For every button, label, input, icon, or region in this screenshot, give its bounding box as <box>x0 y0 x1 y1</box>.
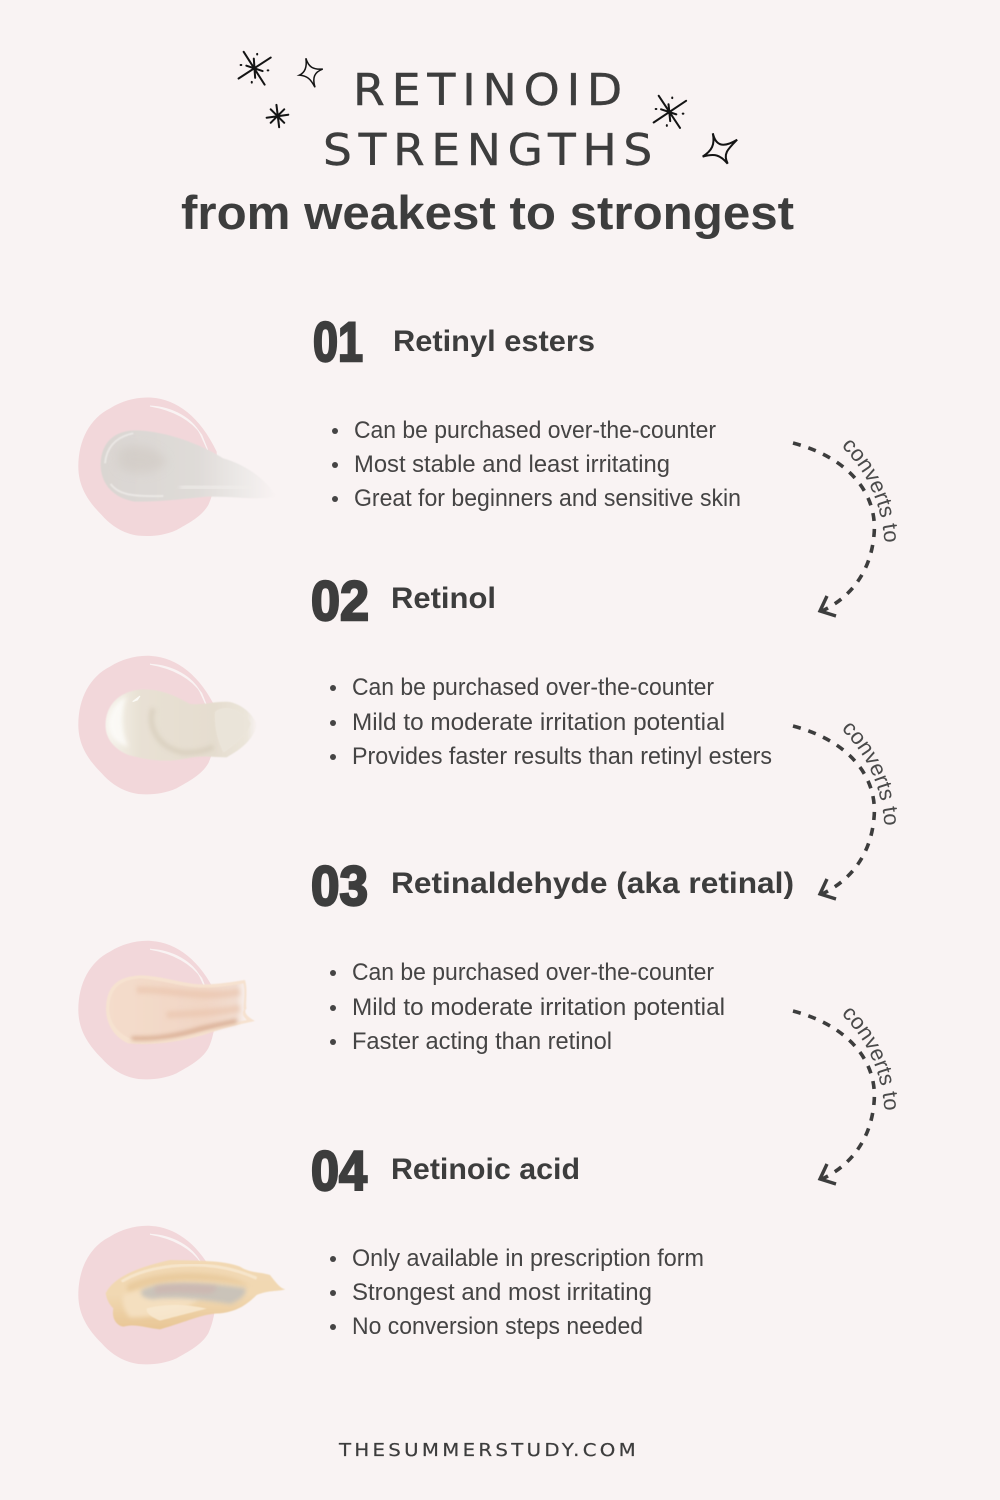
arrow 1: converts to: converts to <box>844 440 897 542</box>
heading: 02 Retinol: 02 <box>311 569 369 632</box>
bullet list 3: Can be purchased over-the-counter <box>352 959 714 986</box>
swatch 3: pink circle and peach scrub <box>78 941 255 1079</box>
bullet list 2: Can be purchased over-the-counter <box>352 674 714 701</box>
swatch 2: pink circle and cream <box>78 656 257 794</box>
footer url: THESUMMERSTUDY.COM <box>338 1440 639 1461</box>
bullet list 1 <box>332 417 741 512</box>
heading: 02 Retinol: Retinol <box>391 582 496 615</box>
arrow 2: converts to <box>792 724 897 901</box>
arrow 1: converts to <box>792 440 897 618</box>
bullet list 3: Mild to moderate irritation potential <box>352 994 725 1021</box>
heading: 01 Retinyl esters: 01 <box>313 310 363 373</box>
bullet list 1: Can be purchased over-the-counter <box>354 417 716 444</box>
heading: 01 Retinyl esters <box>313 310 595 373</box>
heading: 03 Retinaldehyde <box>311 854 794 917</box>
icon: sparkles left <box>239 52 323 127</box>
heading: 04 Retinoic acid: Retinoic acid <box>391 1153 580 1186</box>
swatch 1: pink circle and clear gel <box>78 397 277 536</box>
bullet list 4: Strongest and most irritating <box>352 1279 652 1306</box>
bullet list 4 <box>330 1245 704 1340</box>
heading: 01 Retinyl esters: Retinyl esters <box>393 325 595 358</box>
bullet list 2: Provides faster results than retinyl esters <box>352 743 772 770</box>
heading: 03 Retinaldehyde: Retinaldehyde (aka retinal) <box>391 867 794 900</box>
bullet list 4: Only available in prescription form <box>352 1245 704 1272</box>
swatch 4: pink circle and beige cream <box>78 1226 285 1364</box>
bullet list 1: Great for beginners and sensitive skin <box>354 485 741 512</box>
arrow 3: converts to: converts to <box>844 1008 897 1110</box>
bullet list 2 <box>330 674 772 770</box>
heading: 04 Retinoic acid <box>311 1139 580 1202</box>
bullet list 3: Faster acting than retinol <box>352 1028 612 1055</box>
title <box>323 65 659 176</box>
subtitle: from weakest to strongest <box>181 186 794 239</box>
heading: 03 Retinaldehyde: 03 <box>311 854 368 917</box>
heading: 04 Retinoic acid: 04 <box>311 1139 367 1202</box>
arrow 2: converts to: converts to <box>844 724 897 825</box>
title: RETINOID <box>353 65 629 116</box>
title: STRENGTHS <box>323 125 659 176</box>
bullet list 4: No conversion steps needed <box>352 1313 643 1340</box>
arrow 3: converts to <box>792 1008 897 1186</box>
bullet list 1: Most stable and least irritating <box>354 451 670 478</box>
bullet list 3 <box>330 959 725 1055</box>
heading: 02 Retinol <box>311 569 496 632</box>
bullet list 2: Mild to moderate irritation potential <box>352 709 725 736</box>
icon: sparkles right <box>654 96 737 164</box>
